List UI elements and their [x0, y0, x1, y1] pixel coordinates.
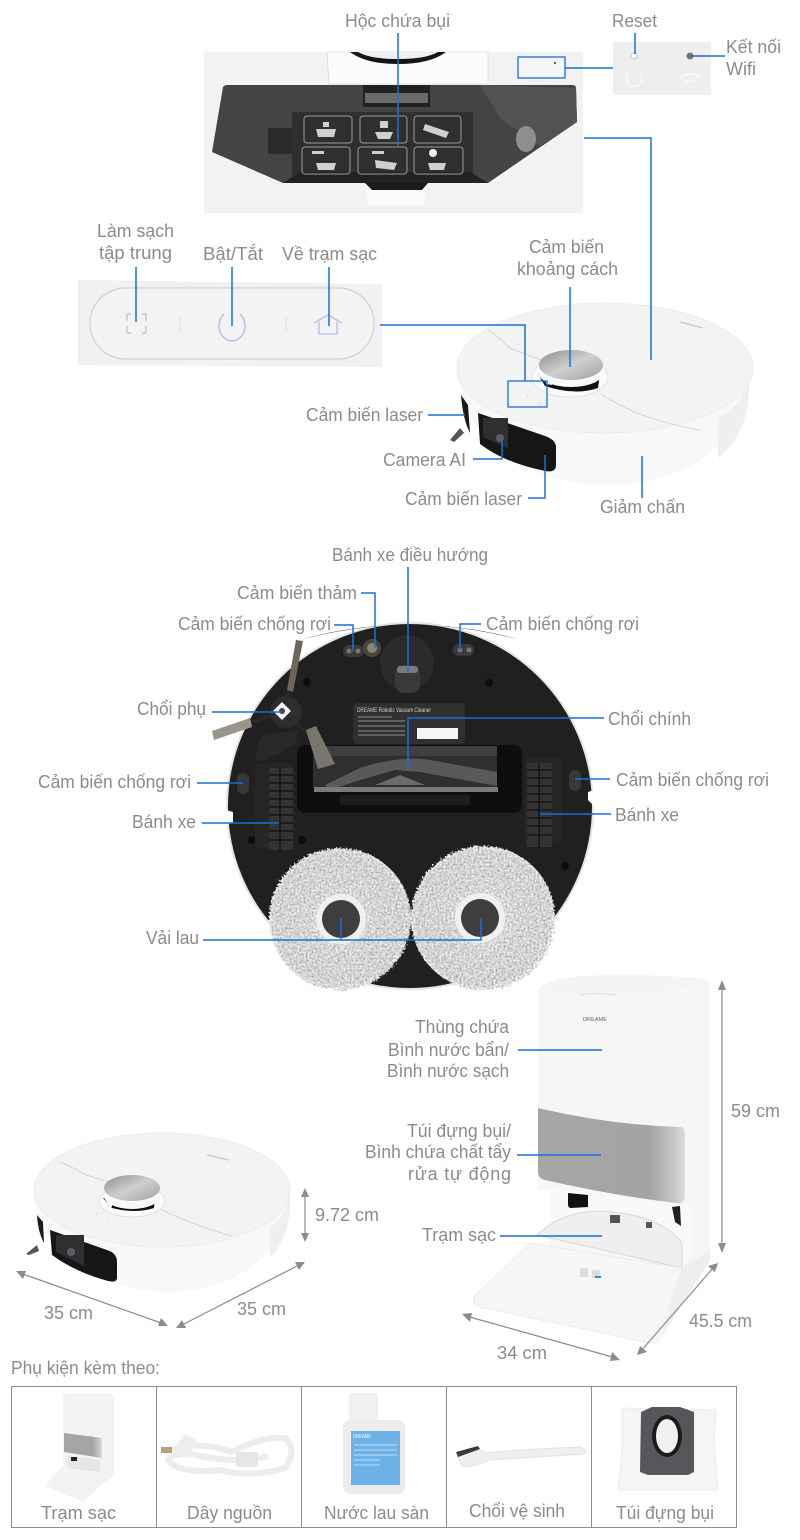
label: water tanks: Thùng chứa [415, 1017, 510, 1037]
leader: dust bin to robot [584, 138, 651, 360]
label: navigation wheel: Bánh xe điều hướng [332, 545, 488, 565]
label: distance sensor: Cảm biến [529, 237, 604, 257]
label: main brush: Chổi chính [608, 709, 691, 729]
label: distance sensor [517, 237, 618, 367]
robot top view [450, 303, 753, 485]
sensors [237, 639, 581, 794]
accessory: power cord [161, 1434, 292, 1523]
label: main brush [408, 709, 691, 770]
icon: power [219, 314, 245, 341]
label: laser sensor left: Cảm biến laser [306, 405, 423, 425]
robot underside [212, 622, 594, 990]
label: power [203, 243, 263, 326]
docking station [473, 975, 710, 1343]
accessory: dust bag: Túi đựng bụi [616, 1503, 714, 1523]
accessory: cleaning brush: Chổi vệ sinh [469, 1501, 565, 1521]
label: focused clean: tập trung [99, 243, 172, 263]
icon: focus clean [127, 314, 146, 333]
accessory: floor cleaner bottle: DREAME [353, 1434, 372, 1440]
dimension: station width [462, 1313, 620, 1363]
label: mop pads [146, 918, 481, 948]
dimension: station width: 34 cm [497, 1343, 547, 1363]
dimension: robot depth left [16, 1271, 168, 1326]
label: focused clean [97, 221, 174, 322]
brand label plate: DREAME Robotic Vacuum Cleaner [357, 708, 431, 714]
heading: included accessories: Phụ kiện kèm theo: [11, 1358, 160, 1378]
panel: control keypad [78, 280, 382, 367]
side brush [212, 640, 335, 769]
label: laser sensor front: Cảm biến laser [405, 489, 522, 509]
label: wheel right: Bánh xe [615, 805, 679, 825]
dimension: station depth: 45.5 cm [689, 1311, 752, 1331]
label: cliff sensor top right: Cảm biến chống rơi [486, 614, 639, 634]
label: wheel right [540, 805, 679, 825]
label: dust bag and detergent: Bình chứa chất tẩy [365, 1142, 511, 1162]
callout box: keypad location on robot [380, 325, 547, 407]
label: dust bin [345, 11, 450, 146]
label: charging dock: Trạm sạc [422, 1225, 496, 1245]
docking station: DREAME [583, 1017, 607, 1023]
accessory: floor cleaner bottle [324, 1393, 429, 1523]
brand label plate [353, 703, 465, 744]
callout box: reset area on the dust bin photo [518, 57, 613, 78]
label: focused clean: Làm sạch [97, 221, 174, 241]
label: dust bag and detergent: rửa tự động [408, 1164, 511, 1184]
accessory: charging dock [41, 1393, 116, 1523]
dimension: station depth [637, 1263, 752, 1355]
dimension: robot depth right [176, 1262, 305, 1328]
label: return to dock [282, 244, 377, 326]
label: wifi connection [691, 37, 781, 79]
label: cliff sensor top left [178, 614, 353, 651]
label: cliff sensor top left: Cảm biến chống rơi [178, 614, 331, 634]
accessory: dust bag [616, 1407, 718, 1523]
side wheels [255, 758, 563, 850]
accessory: floor cleaner bottle: Nước lau sàn [324, 1503, 429, 1523]
label: bumper [600, 456, 685, 517]
accessory: charging dock: Trạm sạc [41, 1503, 116, 1523]
dimension: robot depth right: 35 cm [237, 1299, 286, 1319]
dimension: robot height: 9.72 cm [315, 1205, 379, 1225]
dimension: robot height [301, 1188, 379, 1242]
label: reset [612, 11, 657, 54]
label: wifi connection: Kết nối [726, 37, 781, 57]
label: cliff sensor left: Cảm biến chống rơi [38, 772, 191, 792]
label: AI camera: Camera AI [383, 450, 466, 470]
label: wifi connection: Wifi [726, 59, 756, 79]
label: water tanks: Bình nước sạch [387, 1061, 509, 1081]
accessory: power cord: Dây nguồn [187, 1503, 272, 1523]
photo: dust bin [204, 52, 583, 213]
main brush [297, 745, 522, 813]
label: carpet sensor: Cảm biến thảm [237, 583, 357, 603]
label: wheel left: Bánh xe [132, 812, 196, 832]
label: power: Bật/Tắt [203, 243, 263, 264]
dimension: robot depth left: 35 cm [44, 1303, 93, 1323]
label: dust bag and detergent: Túi đựng bụi/ [407, 1121, 511, 1141]
accessory: cleaning brush [456, 1446, 586, 1521]
label: cliff sensor top right [460, 614, 639, 650]
panel: reset and wifi buttons [613, 42, 711, 95]
label: cliff sensor right: Cảm biến chống rơi [616, 770, 769, 790]
front caster wheel [380, 635, 434, 693]
label: water tanks: Bình nước bẩn/ [388, 1040, 509, 1060]
label: bumper: Giảm chấn [600, 497, 685, 517]
label: side brush: Chổi phụ [137, 699, 206, 719]
label: laser sensor front [405, 455, 545, 509]
label: distance sensor: khoảng cách [517, 259, 618, 279]
mop pads [269, 846, 555, 990]
label: water tanks [387, 1017, 602, 1081]
icon: home [314, 315, 342, 334]
label: dust bin: Hộc chứa bụi [345, 11, 450, 31]
label: dust bag and detergent [365, 1121, 601, 1184]
accessories table [12, 1386, 736, 1528]
dimension: station height [718, 980, 780, 1253]
label: reset: Reset [612, 11, 657, 31]
label: AI camera [383, 440, 502, 470]
robot perspective view [26, 1133, 290, 1292]
label: carpet sensor [237, 583, 375, 648]
dimension: station height: 59 cm [731, 1101, 780, 1121]
label: return to dock: Về trạm sạc [282, 244, 377, 264]
label: mop pads: Vải lau [146, 928, 199, 948]
